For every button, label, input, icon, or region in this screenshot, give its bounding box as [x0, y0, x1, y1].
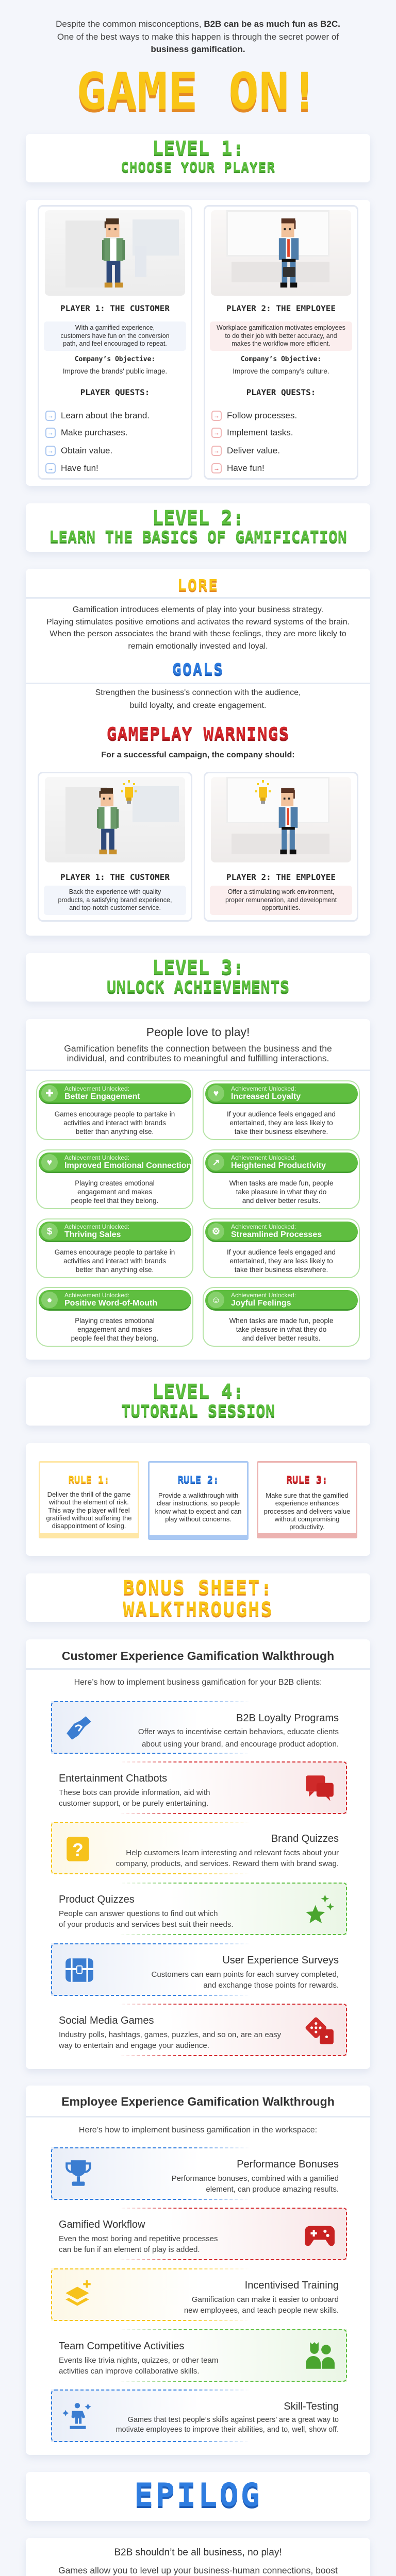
achievement: joyful feelings: and deliver better results.	[242, 1334, 320, 1342]
achievement: emotional connection: people feel that they belong.	[71, 1197, 158, 1205]
illustration: customer	[45, 210, 185, 296]
item: brand quizzes: Help customers learn interesting and relevant facts about your	[126, 1849, 339, 1857]
intro text: One of the best ways to make this happen is through the secret power of	[57, 32, 339, 41]
achievement: streamlined processes: ⚙	[212, 1226, 220, 1236]
achievement: productivity: Achievement Unlocked:	[231, 1154, 296, 1161]
item: product quizzes: Product Quizzes	[59, 1894, 135, 1905]
achievement: better engagement	[36, 1080, 193, 1140]
achievement: joyful feelings: Achievement Unlocked:	[231, 1292, 296, 1299]
level 4 header card	[26, 1377, 370, 1426]
achievement: streamlined processes: take their business elsewhere.	[235, 1266, 328, 1274]
achievement: joyful feelings: take pleasure in what they do	[236, 1326, 326, 1333]
panel: lore, goals, warnings	[26, 569, 370, 936]
item: skill testing: Skill-Testing	[284, 2401, 339, 2412]
player card: customer: →	[47, 465, 54, 472]
player card: employee: Improve the company’s culture.	[233, 367, 329, 375]
lore text: Gamification introduces elements of play into your business strategy.	[73, 605, 323, 614]
item: performance bonuses: Performance bonuses, combined with a gamified	[172, 2174, 339, 2183]
item: gamified workflow: can be fun if an element of play is added.	[59, 2245, 200, 2254]
item: loyalty programs	[51, 1701, 347, 1754]
heading: Employee Experience Gamification Walkthrough	[61, 2095, 335, 2108]
player card: employee: Workplace gamification motivates employees	[217, 324, 345, 331]
heading: lore: LORE	[177, 577, 219, 595]
player card: customer: Make purchases.	[61, 428, 127, 437]
player card: employee	[204, 205, 358, 480]
level 2 header card: LEARN THE BASICS OF GAMIFICATION	[49, 528, 347, 546]
player card: customer: Obtain value.	[61, 446, 112, 455]
player card: employee: PLAYER QUESTS:	[246, 387, 316, 397]
item: chatbots: Entertainment Chatbots	[59, 1773, 167, 1784]
panel: achievements	[26, 1019, 370, 1360]
item: ux surveys: User Experience Surveys	[222, 1955, 339, 1966]
warning card: customer: products, a satisfying brand experience,	[58, 896, 172, 904]
achievement: joyful feelings: ☺	[211, 1295, 221, 1305]
achievement: increased loyalty	[203, 1080, 360, 1140]
item: gamified workflow: Even the most boring and repetitive processes	[59, 2234, 218, 2243]
achievement: increased loyalty: If your audience feels engaged and	[227, 1110, 336, 1118]
player card: employee: to do their job with better accuracy, and	[225, 332, 337, 339]
achievement: productivity: take pleasure in what they do	[236, 1188, 326, 1196]
item: brand quizzes	[51, 1822, 347, 1874]
item: ux surveys: and exchange those points for rewards.	[203, 1981, 339, 1990]
player card: customer: →	[47, 429, 54, 436]
panel: choose your player	[26, 200, 370, 486]
lore text	[46, 605, 350, 651]
bonus sheet header card: BONUS SHEET:	[123, 1577, 273, 1599]
level 1 header card	[26, 134, 370, 182]
achievement: emotional connection	[36, 1149, 193, 1209]
item: team activities: Events like trivia nights, quizzes, or other team	[59, 2356, 218, 2365]
achievement: thriving sales: Thriving Sales	[64, 1230, 121, 1239]
intro text: business gamification.	[151, 44, 245, 54]
intro text	[56, 19, 340, 54]
achievement: word of mouth: Achievement Unlocked:	[64, 1292, 129, 1299]
illustration: employee with bulb	[211, 777, 351, 862]
achievement: word of mouth: people feel that they belong.	[71, 1334, 158, 1342]
rule 3	[257, 1461, 357, 1538]
level 3 header card	[26, 953, 370, 1002]
achievement: streamlined processes: entertained, they are less likely to	[229, 1257, 333, 1265]
achievement: emotional connection: engagement and makes	[77, 1188, 152, 1196]
intro: Here’s how to implement business gamification in the workspace:	[79, 2126, 317, 2134]
item: gamified workflow: Gamified Workflow	[59, 2219, 145, 2230]
goals text	[95, 688, 301, 710]
conclusion text: Games allow you to level up your business-human connections, boost	[58, 2565, 338, 2575]
achievement: emotional connection: Playing creates emotional	[75, 1179, 155, 1187]
achievement: emotional connection: Improved Emotional Connection	[64, 1161, 191, 1170]
achievement: better engagement: Better Engagement	[64, 1092, 140, 1101]
achievement: increased loyalty: take their business elsewhere.	[235, 1128, 328, 1136]
level 1 header card: LEVEL 1:	[152, 137, 244, 159]
conclusion heading: B2B shouldn’t be all business, no play!	[114, 2547, 282, 2558]
level 2 header card: LEVEL 2:	[152, 506, 244, 529]
panel: customer walkthrough	[26, 1639, 370, 2069]
item: team activities	[51, 2329, 347, 2382]
player card: employee: Follow processes.	[227, 411, 297, 420]
item: gamified workflow	[51, 2208, 347, 2260]
achievement: joyful feelings: Joyful Feelings	[231, 1299, 291, 1308]
achievement: word of mouth: Positive Word-of-Mouth	[64, 1299, 157, 1308]
bonus sheet header card	[26, 1573, 370, 1622]
achievement: better engagement: Achievement Unlocked:	[64, 1085, 129, 1092]
intro text: Gamification benefits the connection between the business and the	[64, 1043, 332, 1054]
achievement: streamlined processes: Achievement Unlocked:	[231, 1223, 296, 1230]
player card: employee: PLAYER 2: THE EMPLOYEE	[226, 303, 336, 313]
item: incentivised training: Incentivised Training	[245, 2280, 339, 2291]
achievement: streamlined processes: Streamlined Processes	[231, 1230, 322, 1239]
warning card: employee: opportunities.	[261, 904, 301, 911]
level 2 header card	[26, 503, 370, 552]
player card: employee: Implement tasks.	[227, 428, 293, 437]
player card: customer: Improve the brands' public image.	[63, 367, 167, 375]
warning card: employee	[204, 772, 358, 922]
warning card: customer	[38, 772, 192, 922]
rule 3: RULE 3:	[286, 1474, 328, 1485]
item: ux surveys: Customers can earn points for each survey completed,	[151, 1970, 339, 1979]
achievement: word of mouth: ●	[47, 1295, 52, 1305]
achievement: word of mouth: Playing creates emotional	[75, 1317, 155, 1325]
player card: customer: →	[47, 412, 54, 419]
player card: employee: Deliver value.	[227, 446, 280, 455]
item: brand quizzes: Brand Quizzes	[271, 1833, 339, 1844]
achievement: streamlined processes	[203, 1218, 360, 1278]
player card: customer	[38, 205, 192, 480]
lore text: When the person associates the brand with these feelings, they are more likely to	[50, 630, 346, 638]
panel: employee walkthrough	[26, 2086, 370, 2455]
achievement: productivity: and deliver better results.	[242, 1197, 320, 1205]
achievement: thriving sales: Games encourage people to partake in	[55, 1248, 175, 1256]
achievement: word of mouth: engagement and makes	[77, 1326, 152, 1333]
achievement: productivity: When tasks are made fun, people	[229, 1179, 333, 1187]
player card: employee: Have fun!	[227, 463, 265, 473]
rule 3: Make sure that the gamified experience enhances processes and delivers value without compromising productivity.	[264, 1492, 350, 1531]
panel: conclusion	[26, 2538, 370, 2576]
achievement: joyful feelings	[203, 1287, 360, 1347]
achievement: increased loyalty: entertained, they are less likely to	[229, 1119, 333, 1127]
item: loyalty programs: about using your brand, and encourage product adoption.	[142, 1740, 339, 1749]
heading: people love to play: People love to play!	[146, 1025, 250, 1039]
achievement: thriving sales: $	[47, 1226, 52, 1236]
description: customers have fun on the conversion	[60, 332, 170, 339]
quests: PLAYER QUESTS:	[80, 387, 150, 397]
player card: customer: Learn about the brand.	[61, 411, 150, 420]
item: social media games	[51, 2004, 347, 2056]
player card: employee: →	[213, 447, 220, 454]
description: path, and feel encouraged to repeat.	[63, 340, 167, 347]
item: team activities: activities can improve collaborative skills.	[59, 2367, 200, 2376]
item: chatbots	[51, 1761, 347, 1814]
warning card: customer: and top-notch customer service.	[69, 904, 161, 911]
item: incentivised training: new employees, and teach people new skills.	[184, 2306, 339, 2315]
illustration: customer with bulb	[45, 777, 185, 862]
item: skill testing: motivate employees to improve their abilities, and to, well, show off.	[116, 2426, 339, 2434]
achievement: better engagement: ✚	[45, 1088, 54, 1098]
warning card: customer: PLAYER 1: THE CUSTOMER	[60, 872, 170, 882]
item: team activities: Team Competitive Activities	[59, 2341, 184, 2352]
objective: Company’s Objective:	[75, 355, 155, 363]
goals text: Strengthen the business's connection with the audience,	[95, 688, 301, 697]
item: skill testing	[51, 2389, 347, 2442]
rule 2: RULE 2:	[177, 1474, 219, 1485]
achievement: thriving sales: better than anything else.	[76, 1266, 154, 1274]
item: social media games: way to entertain and engage your audience.	[59, 2041, 209, 2050]
item: performance bonuses: element, can produce amazing results.	[206, 2185, 339, 2194]
player card: employee: →	[213, 412, 220, 419]
item: social media games: Industry polls, hashtags, games, puzzles, and so on, are an easy	[59, 2030, 281, 2039]
level 3 header card: LEVEL 3:	[152, 956, 244, 978]
level 3 header card: UNLOCK ACHIEVEMENTS	[107, 978, 289, 996]
intro: Here’s how to implement business gamification for your B2B clients:	[74, 1678, 322, 1687]
item: loyalty programs: B2B Loyalty Programs	[236, 1713, 339, 1724]
item: skill testing: Games that test people’s skills against peers’ are a great way to	[128, 2416, 339, 2424]
item: performance bonuses: Performance Bonuses	[237, 2159, 339, 2170]
achievement: word of mouth	[36, 1287, 193, 1347]
heading: Customer Experience Gamification Walkthrough	[62, 1649, 334, 1663]
description: With a gamified experience,	[75, 324, 155, 331]
achievement: better engagement: activities and interact with brands	[63, 1119, 166, 1127]
level 4 header card: LEVEL 4:	[152, 1380, 244, 1402]
lore text: Playing stimulates positive emotions and activates the reward systems of the brain.	[46, 618, 350, 626]
warning card: customer: Back the experience with quality	[69, 888, 161, 895]
achievement: better engagement: Games encourage people to partake in	[55, 1110, 175, 1118]
item: product quizzes: of your products and services best suit their needs.	[59, 1920, 234, 1929]
item: social media games: Social Media Games	[59, 2015, 154, 2026]
achievement: productivity: Heightened Productivity	[231, 1161, 326, 1170]
intro text: Despite the common misconceptions, B2B can be as much fun as B2C.	[56, 19, 340, 29]
rule 1: Deliver the thrill of the game without the element of risk. This way the player will feel gratified without suffering the disappointment of losing.	[46, 1490, 131, 1530]
achievement: productivity	[203, 1149, 360, 1209]
achievement: increased loyalty: Increased Loyalty	[231, 1092, 301, 1101]
player card: employee: makes the workflow more efficient.	[232, 340, 331, 347]
title: GAME ON!: GAME ON!	[76, 62, 320, 121]
achievement: emotional connection: Achievement Unlocked:	[64, 1154, 129, 1161]
item: brand quizzes: company, products, and services. Reward them with brand swag.	[116, 1859, 339, 1868]
achievement: joyful feelings: When tasks are made fun, people	[229, 1317, 333, 1325]
panel: rules	[26, 1443, 370, 1556]
description	[44, 321, 186, 351]
rule 2	[148, 1461, 249, 1540]
achievement: productivity: ↗	[212, 1157, 220, 1167]
achievement: thriving sales: Achievement Unlocked:	[64, 1223, 129, 1230]
item: performance bonuses	[51, 2147, 347, 2200]
rule 1: RULE 1:	[68, 1474, 110, 1485]
goals text: build loyalty, and create engagement.	[130, 701, 266, 710]
rule 2: Provide a walkthrough with clear instructions, so people know what to expect and can play without concerns.	[155, 1492, 241, 1523]
heading: gameplay warnings: GAMEPLAY WARNINGS	[107, 723, 289, 743]
item: brand quizzes: ?	[72, 1840, 84, 1860]
lore text: remain emotionally invested and loyal.	[128, 642, 268, 651]
player title: PLAYER 1: THE CUSTOMER	[60, 303, 170, 313]
player card: employee: →	[213, 429, 220, 436]
achievement: better engagement: better than anything else.	[76, 1128, 154, 1136]
achievement: increased loyalty: ♥	[213, 1088, 219, 1098]
player card: employee: →	[213, 465, 220, 472]
item: incentivised training: Gamification can make it easier to onboard	[192, 2295, 339, 2304]
item: product quizzes: People can answer questions to find out which	[59, 1909, 218, 1918]
level 1 header card: CHOOSE YOUR PLAYER	[121, 160, 275, 175]
illustration: employee	[211, 210, 351, 296]
intro text	[64, 1043, 332, 1063]
item: incentivised training	[51, 2268, 347, 2321]
epilog header card: EPILOG	[134, 2476, 262, 2514]
player card: customer: →	[47, 447, 54, 454]
player card: employee: Company’s Objective:	[241, 355, 321, 363]
achievement: thriving sales: activities and interact with brands	[63, 1257, 166, 1265]
player card: customer: Have fun!	[61, 463, 98, 473]
warnings subtitle: For a successful campaign, the company should:	[101, 751, 295, 759]
item: chatbots: customer support, or be purely entertaining.	[59, 1799, 208, 1808]
bonus sheet header card: WALKTHROUGHS	[123, 1598, 273, 1620]
achievement: increased loyalty: Achievement Unlocked:	[231, 1085, 296, 1092]
achievement: thriving sales	[36, 1218, 193, 1278]
item: product quizzes	[51, 1883, 347, 1935]
warning card: employee: proper remuneration, and development	[225, 896, 337, 904]
warning card: employee: PLAYER 2: THE EMPLOYEE	[226, 872, 336, 882]
warning card: employee: Offer a stimulating work environment,	[228, 888, 334, 895]
epilog header card	[26, 2472, 370, 2521]
rule 1	[39, 1461, 139, 1538]
item: ux surveys	[51, 1943, 347, 1996]
intro text: individual, and contributes to meaningful and fulfilling interactions.	[67, 1053, 329, 1063]
heading: goals: GOALS	[172, 660, 224, 679]
item: loyalty programs: Offer ways to incentivise certain behaviors, educate clients	[138, 1727, 339, 1736]
achievement: streamlined processes: If your audience feels engaged and	[227, 1248, 336, 1256]
item: chatbots: These bots can provide information, aid with	[59, 1788, 210, 1797]
level 4 header card: TUTORIAL SESSION	[121, 1402, 275, 1420]
achievement: emotional connection: ♥	[47, 1157, 52, 1167]
